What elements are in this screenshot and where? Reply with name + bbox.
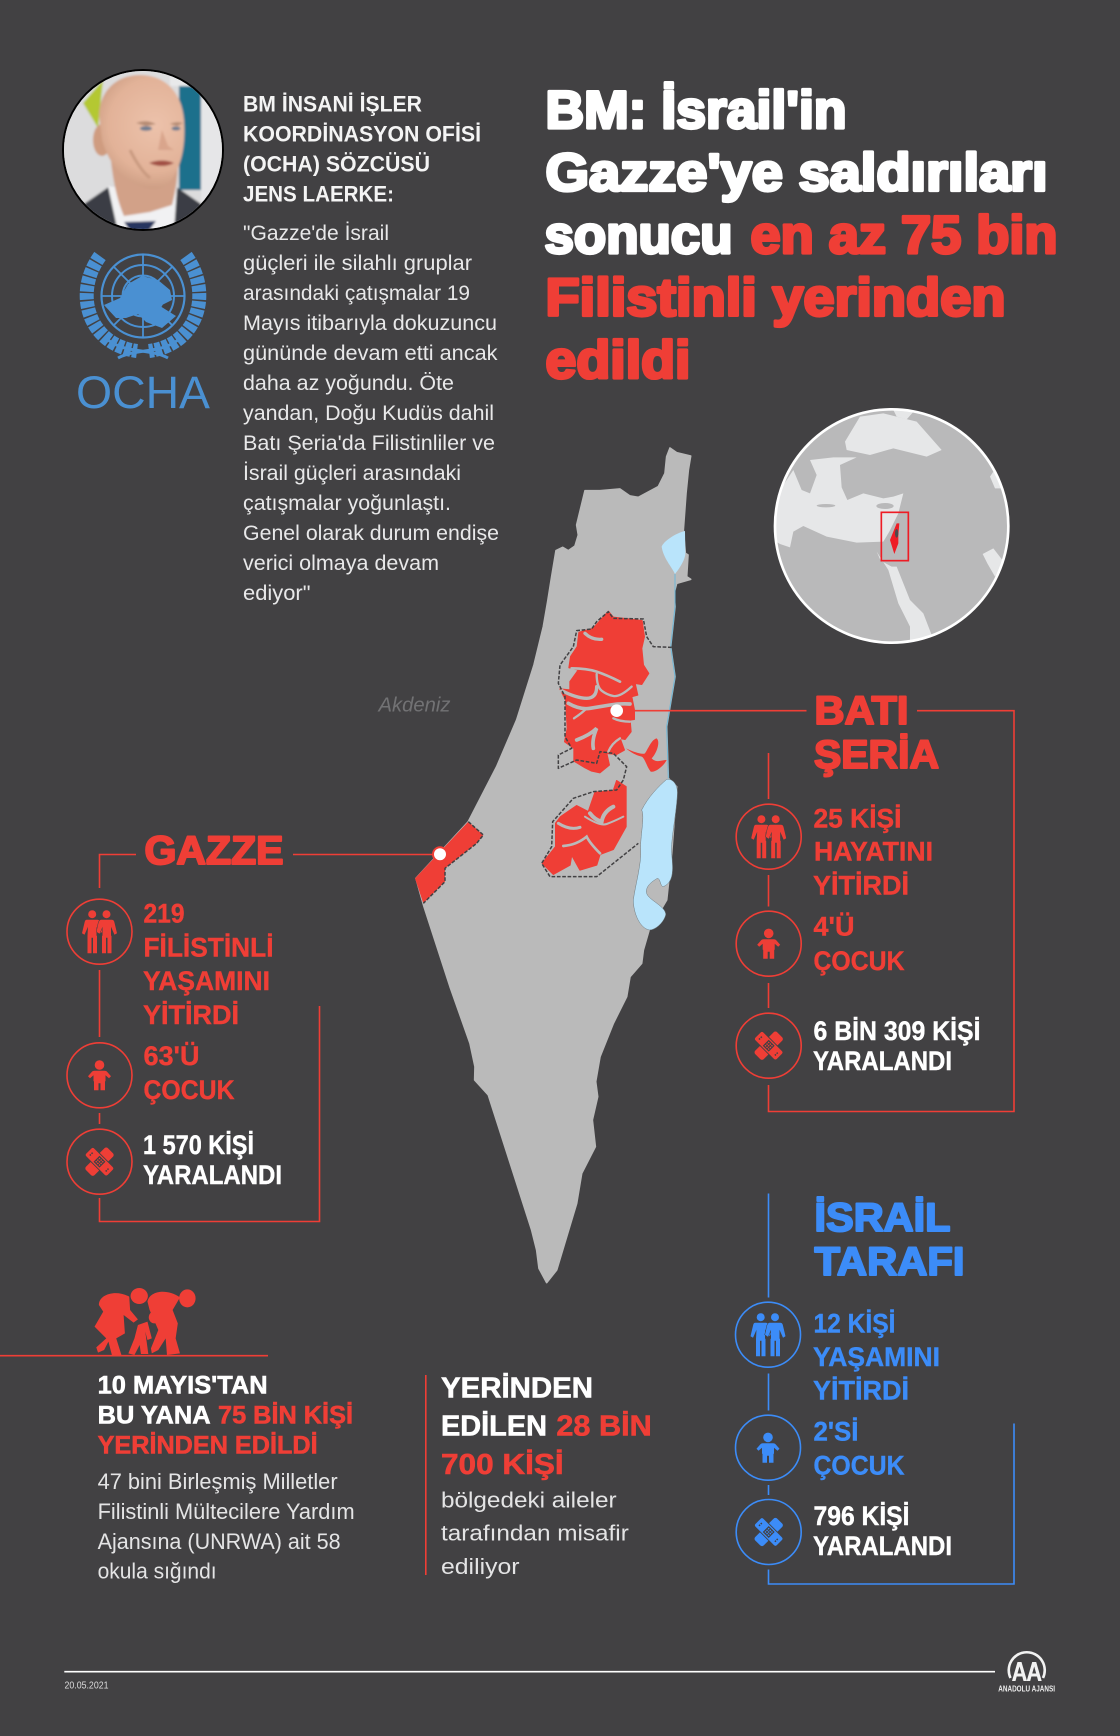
land [416,448,691,1283]
heading text: YERİNDEN [441,1372,593,1404]
OCHA wordmark: OCHA [76,367,210,418]
heading: Batı Şeria: ŞERİA [814,733,939,777]
Caspian Sea [990,472,1001,488]
deaths text: YİTİRDİ [813,870,909,900]
injured text [143,1130,282,1190]
Dead Sea [633,779,677,930]
quote text: "Gazze'de İsrail [243,222,389,245]
heading text: 700 KİŞİ [441,1449,564,1481]
heading: İsrail tarafı [814,1196,964,1284]
footer [64,1652,1055,1694]
UN emblem [87,254,199,358]
body text: 47 bini Birleşmiş Milletler [98,1469,338,1494]
deaths text: YAŞAMINI [813,1342,940,1372]
deaths text: YİTİRDİ [143,1000,239,1030]
Jordan river [667,574,675,778]
icon: child [736,1415,800,1480]
body text [441,1487,629,1579]
title: Filistinli yerinden [546,268,1006,328]
label: Akdeniz: Akdeniz [377,694,450,716]
deaths text: YİTİRDİ [813,1375,909,1405]
panel: 28 thousand hosted [426,1372,652,1579]
title: sonucu [544,206,732,265]
children text: 2'Sİ [814,1417,858,1447]
quote text: çatışmalar yoğunlaştı. [243,492,451,515]
injured text: 796 KİŞİ [814,1501,910,1531]
heading text: BU YANA [98,1401,211,1429]
West Bank south [542,781,626,874]
body text [98,1469,355,1583]
children text: ÇOCUK [814,1450,904,1480]
locator globe [773,409,1010,645]
deaths text: FİLİSTİNLİ [144,933,274,963]
quote text: arasındaki çatışmalar 19 [243,282,470,305]
speaker heading: JENS LAERKE: [243,182,394,206]
heading: İsrail tarafı: İSRAİL [814,1196,950,1240]
children text [814,912,904,976]
heading: Gazze: GAZZE [144,829,284,873]
children text: ÇOCUK [814,946,904,976]
deaths text [813,803,933,900]
heading text: 28 BİN [556,1411,652,1443]
heading text [98,1371,353,1459]
injured text: 1 570 KİŞİ [143,1130,254,1160]
heading text [441,1372,652,1481]
quote text: Batı Şeria'da Filistinliler ve [243,432,495,455]
Persian Gulf [982,548,1002,576]
injured text: YARALANDI [813,1046,952,1076]
Mediterranean Sea [773,457,903,547]
injured text: YARALANDI [813,1531,952,1561]
icon: adults [736,804,801,869]
panel: İsrail tarafı [736,1194,1014,1584]
date: 20.05.2021 [64,1680,109,1692]
heading: İsrail tarafı: TARAFI [814,1240,964,1284]
map of Israel and Palestine [415,448,691,1283]
portrait photo: Jens Laerke [62,69,224,231]
body text: tarafından misafir [441,1521,629,1546]
title [544,81,1058,390]
West Bank north [560,611,667,773]
quote text: ediyor" [243,582,310,605]
Anadolu Ajansı logo: ANADOLU AJANSI [998,1684,1055,1694]
speaker heading: (OCHA) SÖZCÜSÜ [243,152,430,176]
heading text: EDİLEN [441,1411,547,1443]
map dot: West Bank [610,704,623,717]
injured text [813,1016,980,1076]
heading: Batı Şeria [814,689,939,777]
quote text [243,222,499,605]
OCHA logo [76,254,210,418]
title: en az 75 bin [750,206,1058,265]
Red Sea [877,552,932,645]
deaths text: YAŞAMINI [143,966,270,996]
icon: child [736,911,801,976]
icon: fleeing family [95,1288,196,1355]
body text: Filistinli Mültecilere Yardım [98,1499,355,1524]
injured text: YARALANDI [143,1160,282,1190]
deaths text: 12 KİŞİ [814,1308,896,1338]
icon: bandage [736,1013,801,1078]
body text: ediliyor [441,1554,520,1579]
children text [144,1041,234,1105]
body text: Ajansına (UNRWA) ait 58 [98,1529,341,1554]
injured text [813,1501,952,1561]
deaths text: HAYATINI [814,837,933,867]
map dot: Gaza [433,847,447,861]
heading: Batı Şeria: BATI [814,689,908,733]
title: edildi [546,331,690,390]
title: BM: İsrail'in [546,81,846,140]
children text: ÇOCUK [144,1075,234,1105]
icon: adults [67,899,132,964]
body text: bölgedeki aileler [441,1487,617,1512]
icon: child [67,1043,132,1108]
Black Sea [845,413,942,457]
Anadolu Ajansı logo [998,1652,1055,1694]
speaker heading: BM İNSANİ İŞLER [243,92,422,116]
quote text: Mayıs itibarıyla dokuzuncu [243,312,497,335]
Gaza strip [415,822,483,903]
panel: Gazze [67,829,447,1222]
quote text: güçleri ile silahlı gruplar [243,252,472,275]
speaker heading: KOORDİNASYON OFİSİ [243,122,481,146]
quote text: daha az yoğundu. Öte [243,372,454,395]
panel: Batı Şeria [610,689,1014,1112]
icon: bandage [67,1129,132,1194]
children text [814,1417,904,1480]
quote text: yandan, Doğu Kudüs dahil [243,402,494,425]
icon: bandage [736,1500,801,1564]
deaths text: 219 [144,898,184,928]
deaths text: 25 KİŞİ [814,803,902,833]
icon: adults [736,1302,800,1367]
deaths text [143,898,274,1030]
dashed borders [423,612,672,903]
quote text: verici olmaya devam [243,552,439,575]
quote text: gününde devam etti ancak [243,342,498,365]
quote text: Genel olarak durum endişe [243,522,499,545]
children text: 63'Ü [144,1041,200,1071]
panel: 75 thousand displaced [0,1288,355,1583]
speaker heading [243,92,481,206]
injured text: 6 BİN 309 KİŞİ [814,1016,980,1046]
heading text: YERİNDEN EDİLDİ [98,1431,318,1459]
title: Gazze'ye saldırıları [546,144,1048,202]
quote text: İsrail güçleri arasındaki [243,462,461,485]
body text: okula sığındı [98,1558,217,1583]
Sea of Galilee [662,531,685,574]
children text: 4'Ü [814,912,854,942]
deaths text [813,1308,940,1405]
heading text: 75 BİN KİŞİ [218,1401,353,1429]
heading text: 10 MAYIS'TAN [98,1371,268,1399]
